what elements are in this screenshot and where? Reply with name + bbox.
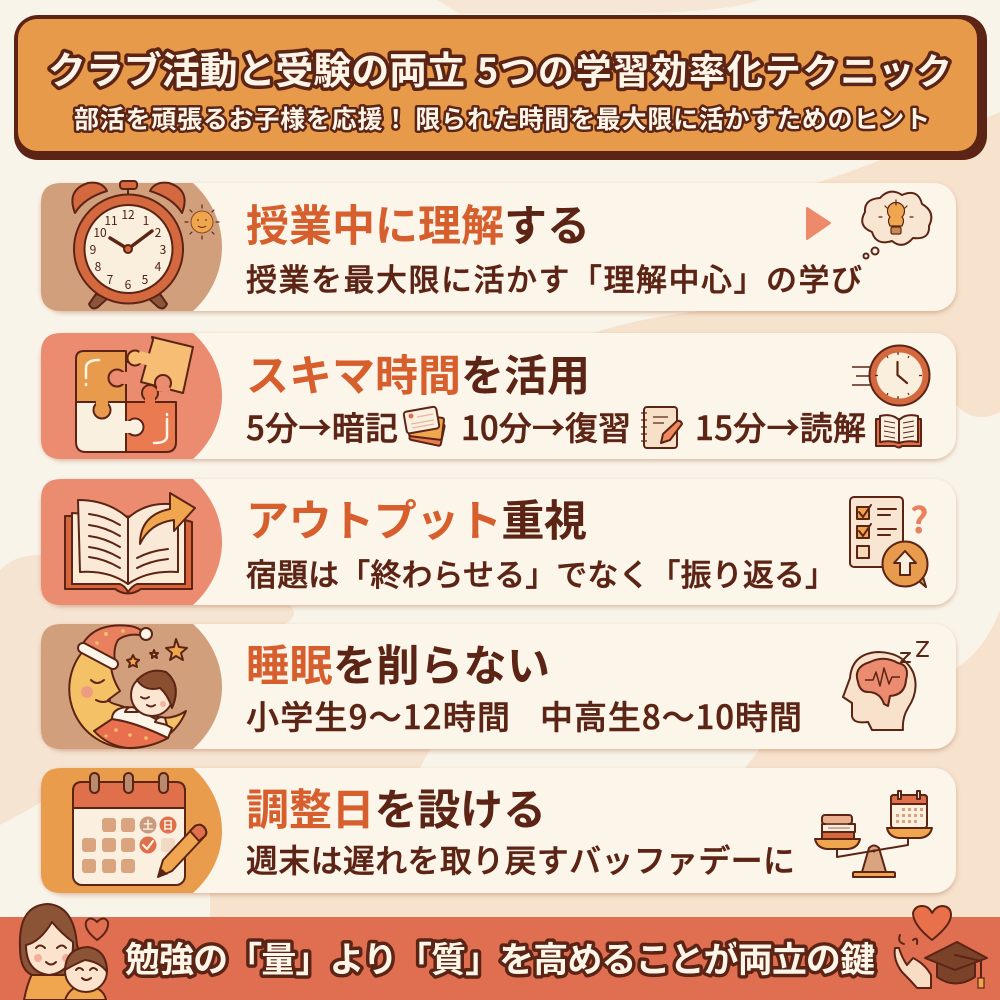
icon: alarm clock: 3 bbox=[160, 241, 166, 258]
icon: open book with arrow bbox=[65, 493, 195, 594]
description: 5分: 5分→暗記 bbox=[246, 402, 398, 450]
question mark: ? bbox=[910, 492, 929, 544]
icon: alarm clock: 11 bbox=[104, 212, 118, 229]
description: 宿題は「終わらせる」でなく「振り返る」 bbox=[246, 550, 836, 595]
heading: 授業中に理解する bbox=[246, 192, 590, 254]
description: 10分: 10分→復習 bbox=[461, 402, 631, 450]
footer banner bbox=[0, 904, 1000, 1000]
icon: brain in head with zzz bbox=[843, 642, 928, 730]
icon: alarm clock: 10 bbox=[93, 224, 107, 241]
title bbox=[48, 40, 952, 95]
icon: heart, hand and graduation cap bbox=[895, 906, 987, 988]
icon: fast clock bbox=[852, 346, 930, 406]
heart bbox=[86, 918, 108, 940]
title: 5つの学習効率化テクニック bbox=[477, 43, 952, 95]
title: クラブ活動と受験の両立 bbox=[48, 40, 465, 95]
icon: sleeping moon and child bbox=[69, 625, 187, 748]
icon: calendar with pencil bbox=[73, 773, 206, 885]
icon: puzzle bbox=[76, 337, 193, 452]
panel: 授業中に理解する bbox=[41, 181, 956, 311]
description: 15分: 15分→読解 bbox=[695, 402, 866, 450]
icon: notebook and pencil bbox=[641, 407, 682, 448]
icon: alarm clock: 7 bbox=[107, 271, 114, 288]
footer message: 勉強の「量」より「質」を高めることが両立の鍵 bbox=[125, 932, 875, 983]
panel: スキマ時間を活用 bbox=[41, 333, 956, 459]
icon: flash cards bbox=[403, 406, 445, 446]
icon: alarm clock: 8 bbox=[95, 258, 102, 275]
description bbox=[246, 691, 802, 739]
panel: 調整日を設ける bbox=[41, 768, 956, 893]
icon: checklist with question and upload bubble bbox=[850, 492, 929, 587]
header banner bbox=[14, 15, 987, 160]
icon: balance scale with books and calendar bbox=[815, 791, 932, 877]
panel: アウトプット重視 bbox=[41, 479, 956, 605]
icon: alarm clock: 4 bbox=[155, 258, 162, 275]
icon: alarm clock: 6 bbox=[125, 276, 132, 293]
zzz bbox=[901, 642, 928, 662]
arrow bbox=[807, 208, 830, 239]
description: 中高生8〜10時間 bbox=[540, 691, 802, 739]
icon: light bulb thought cloud bbox=[862, 192, 931, 258]
description: 週末は遅れを取り戻すバッファデーに bbox=[246, 836, 795, 882]
heading: スキマ時間を活用 bbox=[246, 342, 590, 404]
icon: open book bbox=[876, 415, 921, 448]
heading: 睡眠を削らない bbox=[246, 632, 550, 694]
icon: alarm clock: 2 bbox=[155, 224, 162, 241]
icon: mother and child bbox=[20, 904, 108, 1000]
description: 授業を最大限に活かす「理解中心」の学び bbox=[246, 255, 862, 300]
icon: sun bbox=[185, 205, 219, 239]
heading: 調整日を設ける bbox=[246, 776, 546, 838]
icon: alarm clock: 12 bbox=[121, 206, 135, 223]
heading: アウトプット重視 bbox=[246, 487, 587, 549]
icon: alarm clock: 5 bbox=[142, 271, 149, 288]
icon: calendar with pencil: 日 bbox=[162, 817, 174, 833]
description: 小学生9〜12時間 bbox=[246, 691, 510, 739]
icon: alarm clock: 9 bbox=[90, 241, 96, 258]
icon: alarm clock: 1 bbox=[143, 212, 149, 229]
icon: alarm clock bbox=[72, 181, 185, 308]
icon: calendar with pencil: 土 bbox=[142, 817, 154, 833]
subtitle: 部活を頑張るお子様を応援！ 限られた時間を最大限に活かすためのヒント bbox=[74, 100, 930, 136]
panel: 睡眠を削らない bbox=[41, 624, 956, 749]
